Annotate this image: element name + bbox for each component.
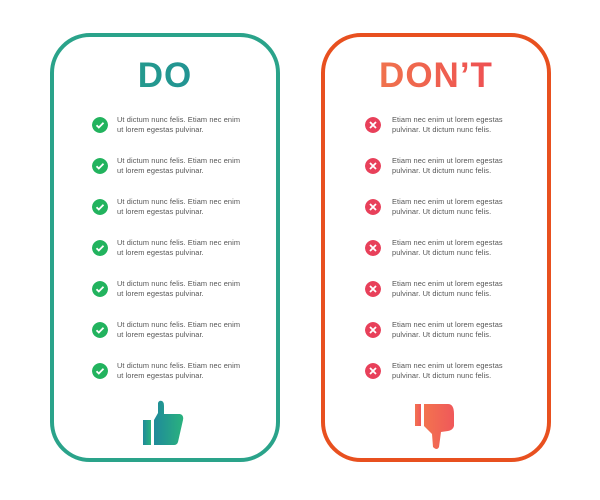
list: do items: ut lorem egestas pulvinar. xyxy=(117,206,204,216)
title: DON'T: DON’T xyxy=(379,56,493,95)
list: dont items: pulvinar. Ut dictum nunc felis. xyxy=(392,248,491,256)
item 6 xyxy=(365,320,503,338)
panel: dont xyxy=(321,33,551,462)
list: do items: ut lorem egestas pulvinar. xyxy=(117,248,204,256)
list: dont items: pulvinar. Ut dictum nunc felis. xyxy=(392,166,491,174)
list: do items: Ut dictum nunc felis. Etiam nec enim xyxy=(117,238,240,247)
item 5 xyxy=(365,279,503,298)
list: dont items: pulvinar. Ut dictum nunc felis. xyxy=(392,330,491,338)
list: dont items: Etiam nec enim ut lorem egestas xyxy=(392,238,503,247)
item 7 xyxy=(365,361,503,380)
list: do items: Ut dictum nunc felis. Etiam nec enim xyxy=(117,156,240,165)
item 4 xyxy=(365,238,503,256)
item 2 xyxy=(365,156,503,174)
list: do items: Ut dictum nunc felis. Etiam nec enim xyxy=(117,320,240,329)
list: dont items xyxy=(365,115,503,380)
list: do items: ut lorem egestas pulvinar. xyxy=(117,166,204,174)
icon: thumbs up xyxy=(143,400,184,445)
list: do items: ut lorem egestas pulvinar. xyxy=(117,370,204,380)
item 5 xyxy=(92,279,240,298)
list: dont items: Etiam nec enim ut lorem egestas xyxy=(392,361,503,370)
list: dont items: pulvinar. Ut dictum nunc felis. xyxy=(392,288,491,298)
list: do items xyxy=(92,115,240,380)
list: do items: ut lorem egestas pulvinar. xyxy=(117,124,204,134)
list: dont items: Etiam nec enim ut lorem egestas xyxy=(392,279,503,288)
title: DON'T xyxy=(325,56,547,96)
icon: thumbs down xyxy=(415,404,454,449)
item 4 xyxy=(92,238,240,256)
title: DO xyxy=(54,56,276,96)
item 7 xyxy=(92,361,240,380)
list: dont items: Etiam nec enim ut lorem egestas xyxy=(392,156,503,165)
list: dont items: Etiam nec enim ut lorem egestas xyxy=(392,115,503,124)
item 3 xyxy=(92,197,240,216)
list: do items: ut lorem egestas pulvinar. xyxy=(117,288,204,298)
list: dont items: Etiam nec enim ut lorem egestas xyxy=(392,197,503,206)
item 1 xyxy=(92,115,240,134)
list: dont items: pulvinar. Ut dictum nunc felis. xyxy=(392,206,491,216)
panel: do xyxy=(50,33,280,462)
item 2 xyxy=(92,156,240,174)
item 3 xyxy=(365,197,503,216)
list: do items: ut lorem egestas pulvinar. xyxy=(117,330,204,338)
list: do items: Ut dictum nunc felis. Etiam nec enim xyxy=(117,361,240,370)
title: DO: DO xyxy=(138,56,192,95)
item 6 xyxy=(92,320,240,338)
item 1 xyxy=(365,115,503,134)
list: dont items: pulvinar. Ut dictum nunc felis. xyxy=(392,370,491,380)
list: do items: Ut dictum nunc felis. Etiam nec enim xyxy=(117,197,240,206)
list: do items: Ut dictum nunc felis. Etiam nec enim xyxy=(117,115,240,124)
list: dont items: pulvinar. Ut dictum nunc felis. xyxy=(392,124,491,134)
list: do items: Ut dictum nunc felis. Etiam nec enim xyxy=(117,279,240,288)
list: dont items: Etiam nec enim ut lorem egestas xyxy=(392,320,503,329)
